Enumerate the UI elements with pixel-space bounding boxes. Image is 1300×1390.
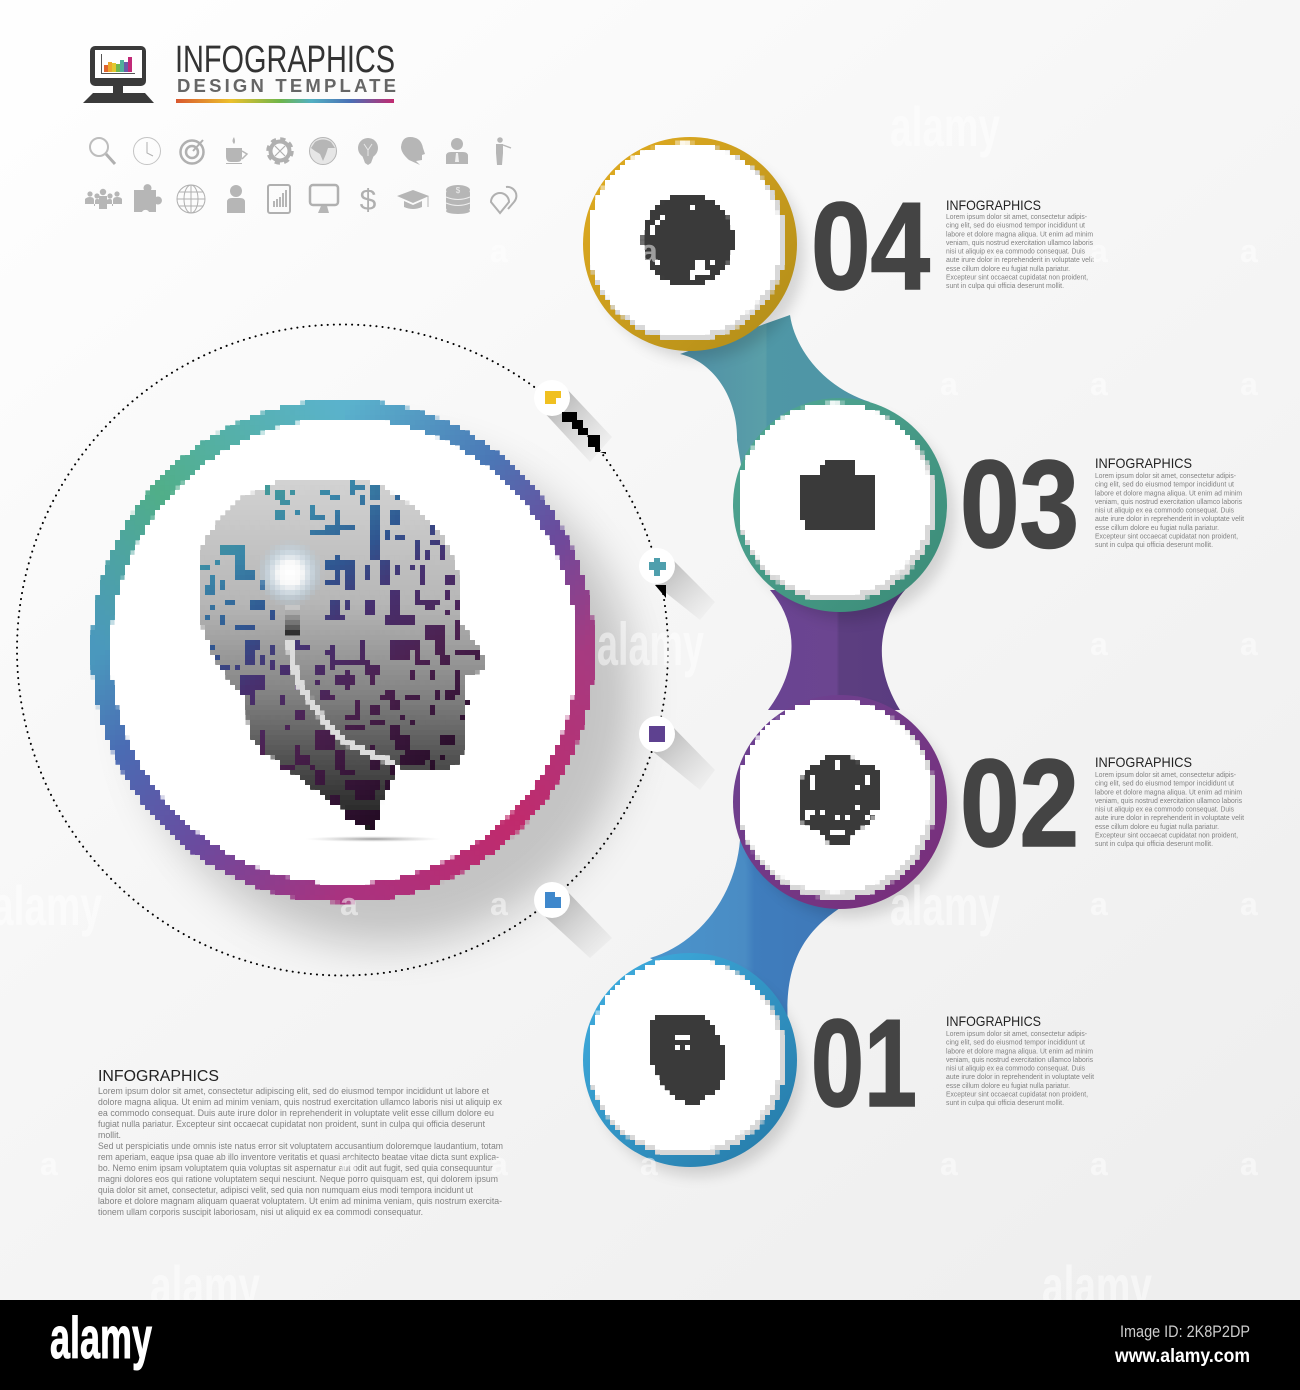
- text block 02: labore et dolore magna aliqua. Ut enim ad minim: [1095, 789, 1242, 796]
- step ring: [733, 695, 947, 909]
- watermarks: alamy: [597, 611, 704, 678]
- text block 02: nisi ut aliquip ex ea commodo consequat. Duis: [1095, 806, 1234, 814]
- text block 01: labore et dolore magna aliqua. Ut enim ad minim: [946, 1048, 1093, 1055]
- head shadow: [305, 836, 441, 842]
- text block 04: nisi ut aliquip ex ea commodo consequat. Duis: [946, 248, 1085, 256]
- text block 02: aute irure dolor in reprehenderit in voluptate velit: [1095, 815, 1244, 822]
- watermarks: a: [1240, 233, 1258, 269]
- connector: teal 04 to 03: [680, 315, 870, 490]
- text block: bottom left: dolore magna aliqua. Ut enim ad minim veniam, quis nostrud exercitation ullamco laboris nisi ut aliquip ex: [98, 1097, 502, 1107]
- icon: light bulb: [358, 138, 378, 165]
- site url: www.alamy.com: [1114, 1346, 1250, 1367]
- node: teal: [639, 548, 715, 620]
- text block 02: [1095, 754, 1244, 848]
- title: INFOGRAPHICS DESIGN TEMPLATE: DESIGN TEMPLATE: [177, 75, 396, 96]
- text block 03: esse cillum dolore eu fugiat nulla pariatur.: [1095, 525, 1219, 532]
- text block 04: esse cillum dolore eu fugiat nulla pariatur.: [946, 266, 1070, 273]
- icon: graduation cap: [397, 190, 429, 209]
- text block 04: [946, 197, 1094, 290]
- text block: bottom left: Sed ut perspiciatis unde omnis iste natus error sit voluptatem accusantium doloremque laudantium, totam: [98, 1141, 503, 1151]
- watermarks: a: [40, 1146, 58, 1182]
- text block 03: cing elit, sed do eiusmod tempor incididunt ut: [1095, 482, 1234, 489]
- text block: bottom left: bo. Nemo enim ipsam voluptatem quia voluptas sit aspernatur aut odit aut fugit, sed quia consequuntur: [98, 1163, 493, 1173]
- watermarks: a: [490, 233, 508, 269]
- icon: coins: $: [456, 186, 461, 195]
- icon: wire globe: [177, 185, 205, 213]
- watermarks: alamy: [150, 1254, 260, 1317]
- footer logo: alamy: [50, 1306, 152, 1371]
- soft shadow of head circle: [135, 445, 635, 945]
- text block 01: Lorem ipsum dolor sit amet, consectetur adipis-: [946, 1031, 1088, 1038]
- icon: dollar sign: $: [360, 184, 377, 217]
- icon: team: [85, 189, 122, 209]
- text block 01: cing elit, sed do eiusmod tempor incididunt ut: [946, 1040, 1085, 1047]
- text block: bottom left: quia dolor sit amet, consectetur, adipisci velit, sed quia non numquam eius modi tempora incidunt ut: [98, 1185, 473, 1195]
- watermarks: a: [640, 1146, 658, 1182]
- text block 04: Lorem ipsum dolor sit amet, consectetur adipis-: [946, 214, 1088, 221]
- step ring: [583, 953, 797, 1167]
- step ring: [733, 398, 947, 612]
- number 03: 03: [960, 436, 1079, 574]
- text block 02: Lorem ipsum dolor sit amet, consectetur adipis-: [1095, 772, 1237, 779]
- watermarks: a: [490, 886, 508, 922]
- icon: coins: [446, 185, 470, 214]
- dotted orbit circle: [17, 324, 668, 976]
- text block 03: [1095, 455, 1244, 549]
- gradient ring: [101, 409, 585, 893]
- connector: blue 02 to 01: [650, 840, 840, 1045]
- text block 04: veniam, quis nostrud exercitation ullamco laboris: [946, 240, 1093, 247]
- panel: step 01: [583, 953, 1094, 1176]
- white disc and icon: [738, 402, 936, 602]
- text block: bottom left: rem aperiam, eaque ipsa quae ab illo inventore veritatis et quasi architecto beatae vitae dicta sunt explica-: [98, 1152, 499, 1162]
- text block 03: Lorem ipsum dolor sit amet, consectetur adipis-: [1095, 473, 1237, 480]
- text block: bottom left: mollit.: [98, 1130, 121, 1140]
- text block 04: cing elit, sed do eiusmod tempor incididunt ut: [946, 223, 1085, 230]
- icon: map pins: [491, 187, 516, 213]
- text block 01: Excepteur sint occaecat cupidatat non proident,: [946, 1091, 1088, 1098]
- panel: step 04: [583, 137, 1094, 359]
- text block: bottom left: ea commodo consequat. Duis aute irure dolor in reprehenderit in voluptate velit esse cillum dolore eu: [98, 1108, 494, 1118]
- watermarks: a: [940, 366, 958, 402]
- watermarks: a: [1090, 366, 1108, 402]
- number 04: 04: [811, 178, 930, 316]
- watermarks: alamy: [890, 95, 1000, 158]
- watermarks: alamy: [890, 874, 1000, 937]
- icon row 2: [85, 184, 516, 217]
- number 01: 01: [811, 995, 917, 1133]
- icon: monitor: [310, 185, 338, 213]
- icon: gear with cross: [268, 139, 292, 163]
- text block: bottom left: fugiat nulla pariatur. Excepteur sint occaecat cupidatat non proident, sunt in culpa qui officia deserunt: [98, 1119, 485, 1129]
- watermarks: a: [940, 1146, 958, 1182]
- icon: head profile: [401, 137, 425, 165]
- step ring: [583, 137, 797, 351]
- watermarks: a: [1240, 366, 1258, 402]
- text block 01: sunt in culpa qui officia deserunt mollit.: [946, 1100, 1064, 1107]
- watermarks: a: [340, 886, 358, 922]
- number 02: 02: [960, 735, 1079, 873]
- watermarks: a: [640, 233, 658, 269]
- icon: user: [227, 185, 245, 213]
- text block 02: Excepteur sint occaecat cupidatat non proident,: [1095, 832, 1238, 839]
- icon: clock: [134, 138, 160, 164]
- icon: businessman: [446, 138, 468, 164]
- text block 01: INFOGRAPHICS: [946, 1013, 1041, 1029]
- white disc: [111, 418, 577, 884]
- logo: monitor with bar chart: [83, 46, 154, 103]
- text block: bottom left: Lorem ipsum dolor sit amet, consectetur adipiscing elit, sed do eiusmod tempor incididunt ut labore et: [98, 1086, 489, 1096]
- watermarks: a: [1240, 886, 1258, 922]
- panel: step 02: [733, 695, 1244, 917]
- connector: purple 03 to 02: [768, 590, 905, 710]
- node: blue: [534, 882, 612, 958]
- panel: step 03: [733, 398, 1244, 620]
- white disc and icon: [588, 142, 786, 341]
- text block 04: aute irure dolor in reprehenderit in voluptate velit: [946, 257, 1094, 264]
- text block 02: cing elit, sed do eiusmod tempor incididunt ut: [1095, 781, 1234, 788]
- text block 02: INFOGRAPHICS: [1095, 754, 1192, 770]
- icon: target: [180, 140, 204, 164]
- text block 02: veniam, quis nostrud exercitation ullamco laboris: [1095, 798, 1242, 805]
- text block: bottom left: tionem ullam corporis suscipit laboriosam, nisi ut aliquid ex ea commodi consequatur.: [98, 1207, 423, 1217]
- icon: tablet chart: [268, 185, 290, 213]
- icon: puzzle piece: [134, 184, 162, 212]
- text block: bottom left: [98, 1068, 503, 1217]
- text block 01: aute irure dolor in reprehenderit in voluptate velit: [946, 1074, 1094, 1081]
- watermarks: alamy: [1042, 1254, 1152, 1317]
- text block 03: veniam, quis nostrud exercitation ullamco laboris: [1095, 499, 1242, 506]
- text block 04: labore et dolore magna aliqua. Ut enim ad minim: [946, 231, 1093, 238]
- text block 02: sunt in culpa qui officia deserunt mollit.: [1095, 841, 1213, 848]
- title: INFOGRAPHICS DESIGN TEMPLATE: INFOGRAPHICS: [175, 39, 395, 81]
- text block: bottom left: labore et dolore magnam aliquam quaerat voluptatem. Ut enim ad minima veniam, quis nostrum exercita-: [98, 1196, 502, 1206]
- white disc and icon: [588, 958, 786, 1157]
- white disc and icon: [738, 700, 936, 899]
- footer bar: [0, 1300, 1300, 1390]
- title: INFOGRAPHICS DESIGN TEMPLATE: [175, 39, 396, 103]
- text block: bottom left: INFOGRAPHICS: [98, 1068, 219, 1085]
- image id: Image ID: 2K8P2DP: [1120, 1322, 1250, 1341]
- icon: coffee cup: [226, 137, 247, 164]
- text block 01: [946, 1013, 1094, 1107]
- icon: magnifier: [90, 138, 115, 164]
- text block: bottom left: magni dolores eos qui ratione voluptatem sequi nesciunt. Neque porro quisquam est, qui dolorem ipsum: [98, 1174, 498, 1184]
- watermarks: a: [1240, 1146, 1258, 1182]
- text block 04: sunt in culpa qui officia deserunt mollit.: [946, 283, 1064, 290]
- text block 04: Excepteur sint occaecat cupidatat non proident,: [946, 274, 1088, 281]
- watermarks: a: [340, 1146, 358, 1182]
- text block 01: veniam, quis nostrud exercitation ullamco laboris: [946, 1057, 1093, 1064]
- watermarks: a: [1090, 233, 1108, 269]
- node: yellow: [534, 380, 612, 462]
- icon: person pointing: [496, 137, 511, 165]
- text block 01: esse cillum dolore eu fugiat nulla pariatur.: [946, 1083, 1070, 1090]
- text block 01: nisi ut aliquip ex ea commodo consequat. Duis: [946, 1066, 1085, 1072]
- icon: pixelated head with circuit and bulb: [198, 478, 483, 830]
- text block 03: labore et dolore magna aliqua. Ut enim ad minim: [1095, 490, 1242, 497]
- text block 03: Excepteur sint occaecat cupidatat non proident,: [1095, 533, 1238, 540]
- watermarks: a: [490, 1146, 508, 1182]
- node: purple: [639, 716, 715, 790]
- text block 03: nisi ut aliquip ex ea commodo consequat. Duis: [1095, 508, 1234, 514]
- text block 02: esse cillum dolore eu fugiat nulla pariatur.: [1095, 824, 1219, 831]
- watermarks: a: [1090, 626, 1108, 662]
- icon row 1: [90, 137, 511, 165]
- watermarks: a: [1240, 626, 1258, 662]
- text block 03: sunt in culpa qui officia deserunt mollit.: [1095, 542, 1213, 549]
- panel: head circle: [101, 409, 585, 893]
- watermarks: a: [1090, 886, 1108, 922]
- icon: earth globe: [310, 138, 336, 164]
- text block 04: INFOGRAPHICS: [946, 197, 1041, 213]
- watermarks: a: [1090, 1146, 1108, 1182]
- text block 03: aute irure dolor in reprehenderit in voluptate velit: [1095, 516, 1244, 523]
- text block 03: INFOGRAPHICS: [1095, 455, 1192, 471]
